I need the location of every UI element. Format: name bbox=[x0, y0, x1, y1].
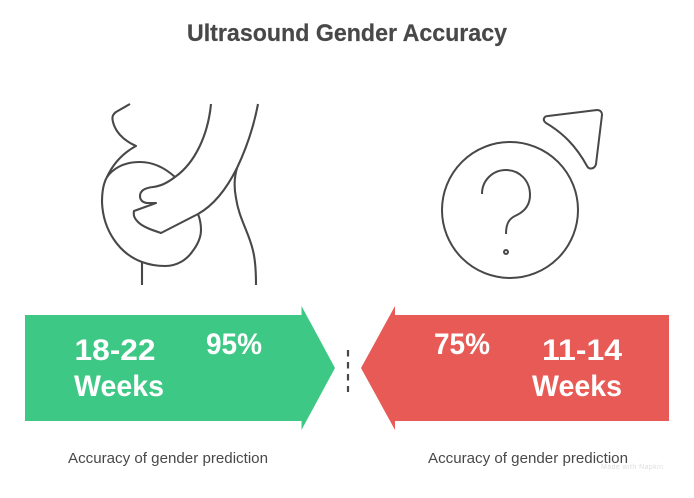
arrow: 11-14 weeks bbox=[361, 306, 669, 430]
label: 11-14 weeks: 11-14 bbox=[542, 334, 622, 367]
watermark: Made with Napkin bbox=[601, 464, 663, 471]
caption left: Accuracy of gender prediction bbox=[68, 450, 268, 467]
arrow: 18-22 weeks bbox=[25, 306, 335, 430]
value: 75%: 75% bbox=[434, 328, 490, 361]
icon: male symbol with question mark bbox=[442, 110, 602, 278]
divider dashes bbox=[347, 350, 349, 392]
label: 18-22 weeks bbox=[74, 334, 164, 403]
value: 95%: 95% bbox=[206, 328, 262, 361]
label: 18-22 weeks: Weeks bbox=[74, 370, 164, 403]
caption right: Accuracy of gender prediction bbox=[428, 450, 628, 467]
label: 11-14 weeks: Weeks bbox=[532, 370, 622, 403]
title: Ultrasound Gender Accuracy bbox=[187, 20, 508, 47]
icon: pregnant body bbox=[102, 104, 258, 285]
label: 11-14 weeks bbox=[532, 334, 622, 403]
label: 18-22 weeks: 18-22 bbox=[74, 334, 156, 367]
